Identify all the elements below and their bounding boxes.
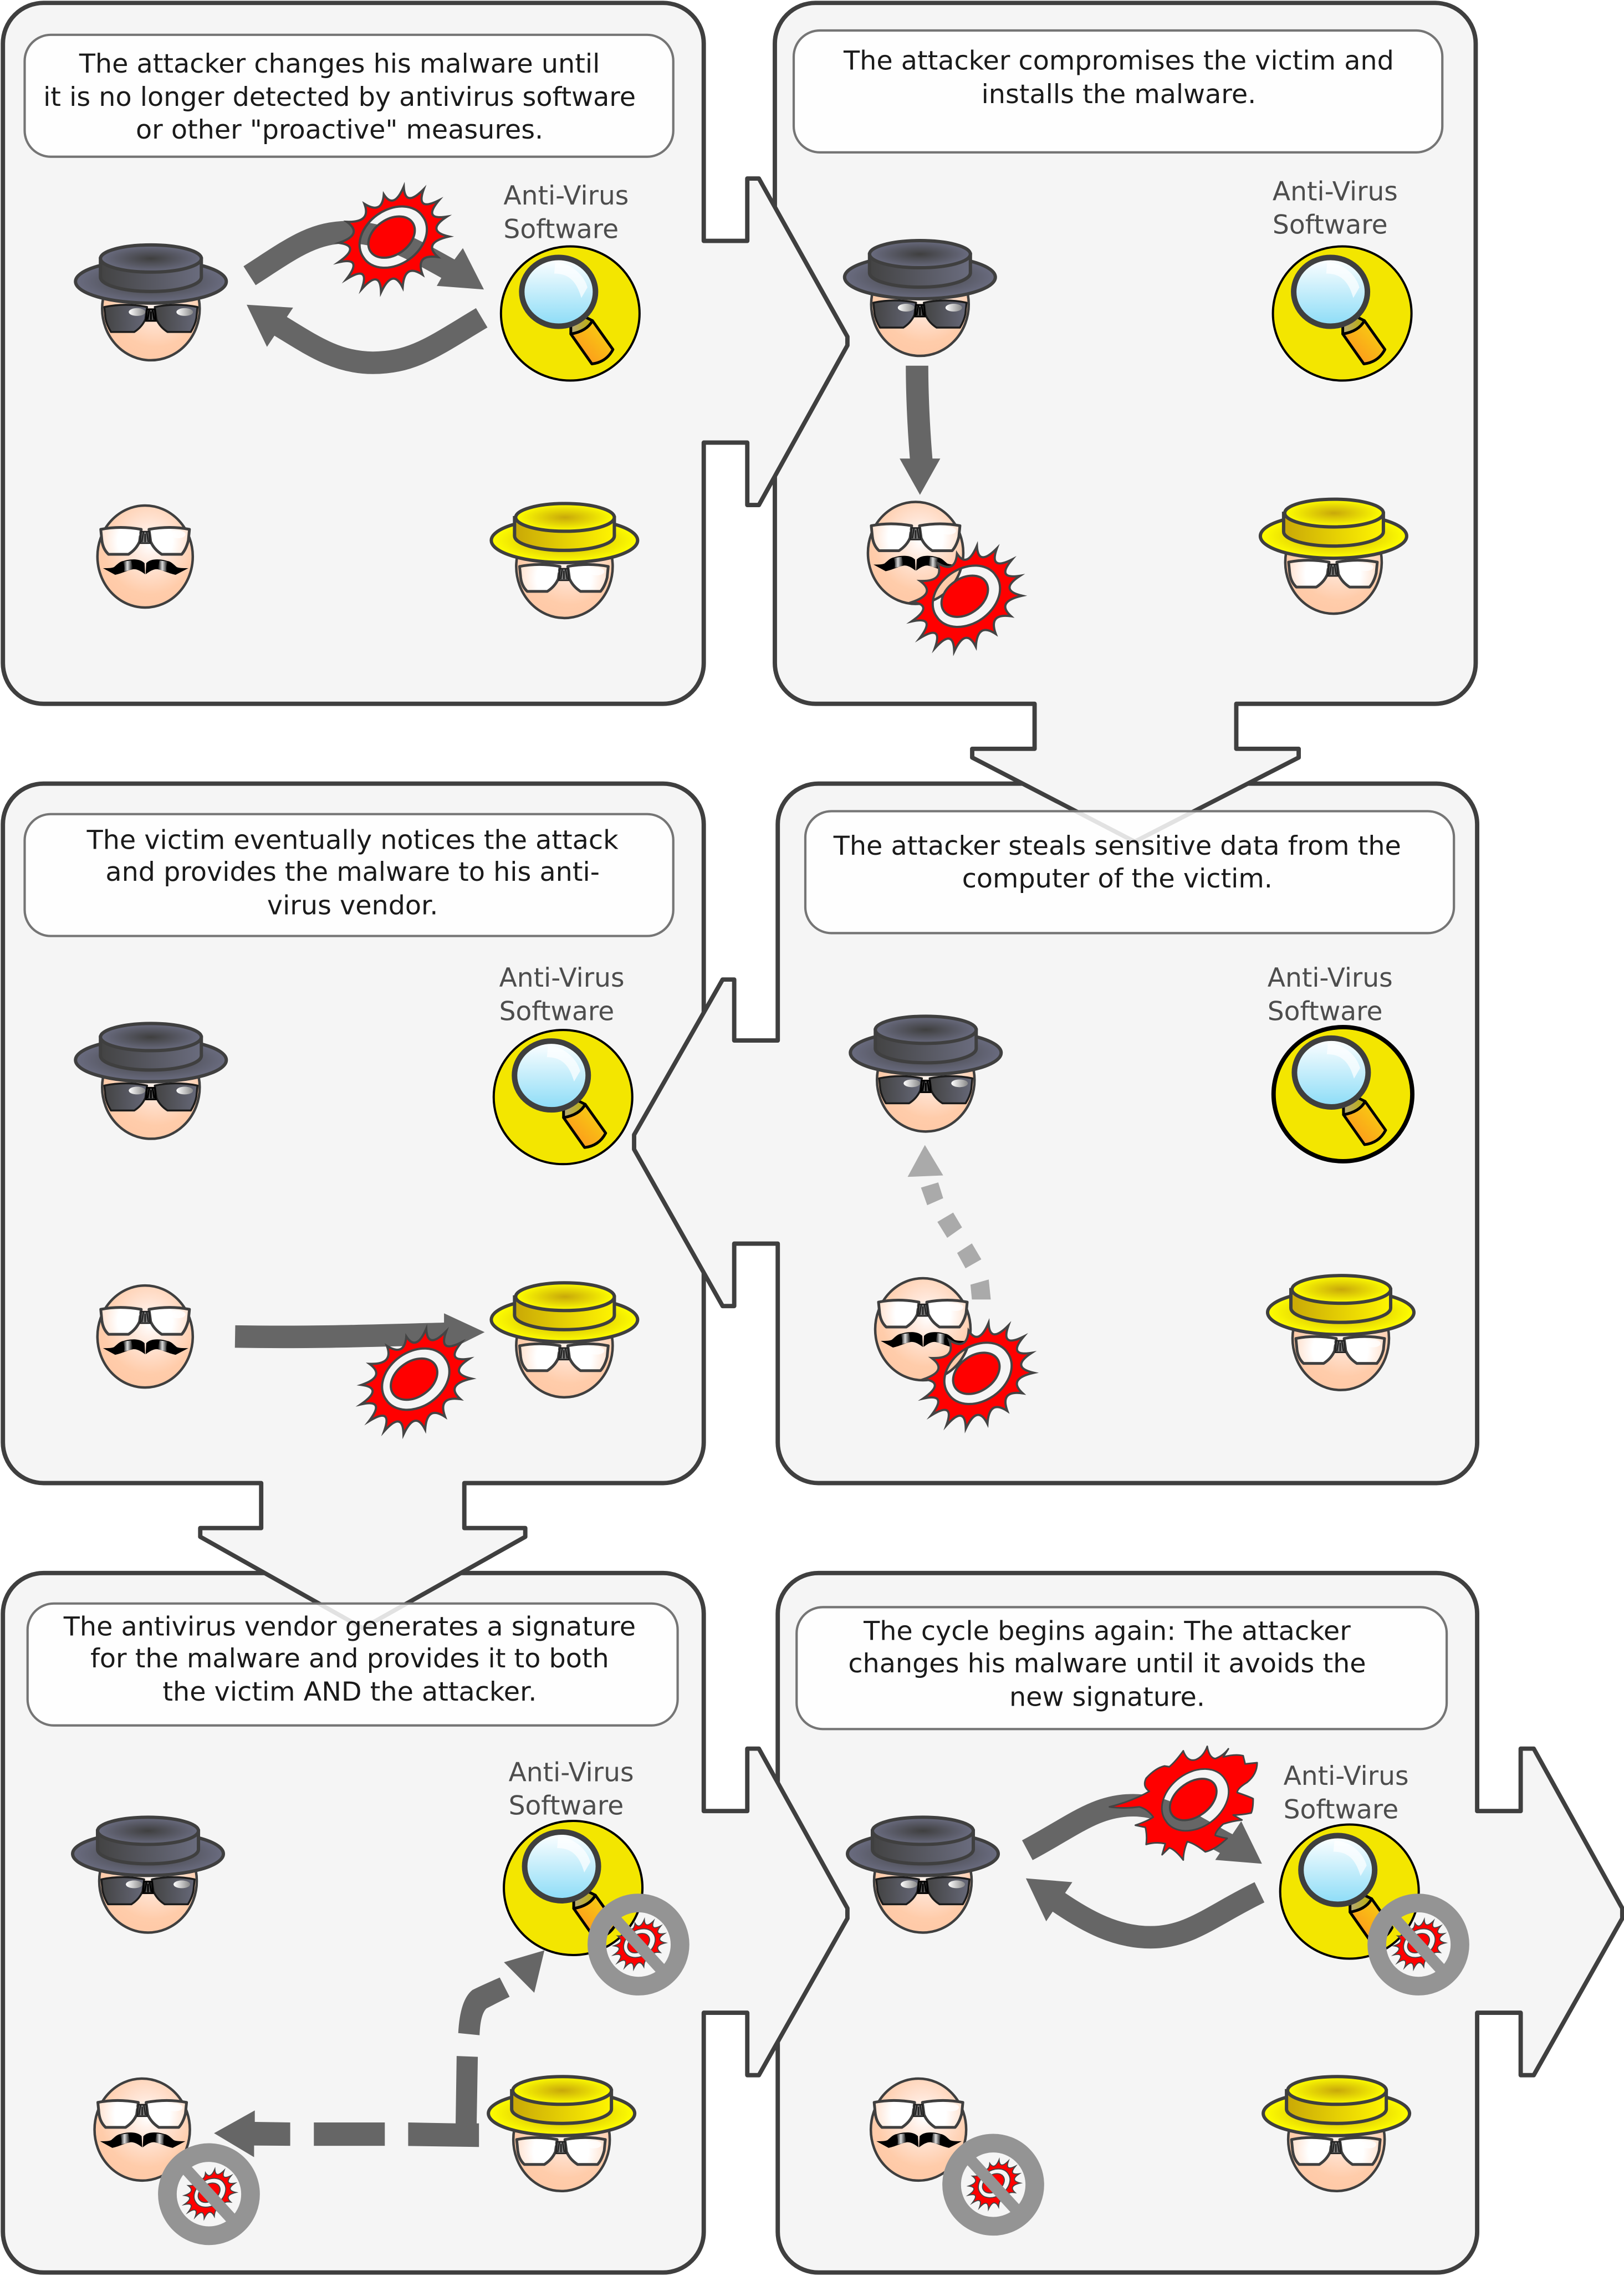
panel outline: step 6 with exit arrow [778,1573,1622,2273]
text box: step 6: The cycle begins again: The attacker [863,1616,1351,1646]
panel outline: step 2 with arrow to step 4 [775,3,1475,841]
icon: antivirus vendor [1268,1275,1414,1390]
panel: step 5 contents [28,1604,680,2236]
icon: victim [98,1285,193,1387]
label: anti-virus software: Software [1284,1794,1398,1825]
icon: blocked malware at anti-virus [1377,1903,1460,1986]
icon: blocked malware at victim [952,2143,1035,2226]
panel: step 3 contents [25,814,673,1435]
label: anti-virus software: Software [1268,996,1382,1027]
arrow: dashed signature distribution [214,1951,544,2157]
arrow: attacker tests malware against antivirus [249,232,484,289]
icon: attacker [845,241,995,356]
text box: step 6: new signature. [1009,1682,1205,1712]
label: anti-virus software: Software [503,214,619,244]
text box: step 6 [796,1607,1447,1729]
label: anti-virus software: Anti-Virus [1268,963,1393,993]
text box: step 2: installs the malware. [982,79,1256,110]
text box: step 6: changes his malware until it avoids the [848,1649,1366,1679]
icon: antivirus vendor [488,2076,635,2191]
icon: anti-virus magnifier [1274,1027,1412,1161]
icon: attacker [75,1023,226,1139]
panel: step 4 contents [805,811,1454,1428]
icon: victim [98,506,193,608]
icon: attacker [73,1817,223,1932]
icon: antivirus vendor [491,503,637,618]
icon: attacker [75,245,226,360]
text box: step 1 [25,35,673,157]
icon: victim [868,502,963,604]
label: anti-virus software: Anti-Virus [503,181,629,211]
arrow: antivirus feedback to attacker [247,305,482,363]
text box: step 3: virus vendor. [267,890,438,921]
text box: step 5 [28,1604,678,1726]
text box: step 5: The antivirus vendor generates a signature [63,1611,636,1642]
label: anti-virus software: Anti-Virus [499,963,625,993]
text box: step 4: The attacker steals sensitive data from the [833,831,1401,861]
text box: step 3: and provides the malware to his anti- [105,857,600,887]
label: anti-virus software: Anti-Virus [1273,176,1398,207]
arrow: attacker to victim [900,366,940,495]
text box: step 4: computer of the victim. [962,864,1273,894]
panel outline: step 5 with arrow to step 6 [3,1573,847,2273]
label: anti-virus software: Anti-Virus [509,1758,634,1788]
icon: blocked malware at victim [167,2152,251,2236]
panel outline: step 4 with arrow to step 3 [634,784,1477,1483]
arrow: attacker tests mutated malware [1028,1805,1262,1864]
panel outline: step 1 with arrow to step 2 [3,3,847,704]
icon: victim [95,2079,190,2181]
panel: step 6 contents [796,1607,1460,2226]
label: anti-virus software: Software [499,996,614,1027]
icon: anti-virus magnifier [1280,1824,1419,1959]
text box: step 5: the victim AND the attacker. [162,1677,537,1707]
icon: attacker [847,1817,998,1932]
text box: step 1: or other "proactive" measures. [136,115,543,145]
text box: step 1: The attacker changes his malware until [79,49,600,79]
icon: anti-virus magnifier [1273,246,1412,380]
icon: anti-virus magnifier [501,246,640,380]
text box: step 4 [805,811,1454,933]
arrow: victim to vendor [235,1313,484,1353]
label: anti-virus software: Software [509,1791,624,1821]
icon: malware on victim [923,1323,1034,1428]
icon: anti-virus magnifier [504,1821,642,1955]
text box: step 5: for the malware and provides it to both [90,1644,609,1674]
arrow: dashed data flow to attacker [908,1145,991,1299]
icon: attacker [850,1016,1001,1131]
icon: victim [875,1278,971,1380]
panel: step 2 contents [794,30,1442,651]
panel: step 1 contents [25,35,673,618]
arrow: antivirus feedback to attacker [1026,1879,1259,1937]
icon: victim [871,2079,966,2181]
text box: step 1: it is no longer detected by antivirus software [43,82,636,113]
icon: malware [361,1329,472,1435]
label: anti-virus software: Software [1273,210,1388,240]
icon: anti-virus magnifier [494,1030,632,1164]
icon: blocked malware at anti-virus [597,1903,680,1986]
icon: antivirus vendor [1263,2076,1409,2191]
text box: step 3: The victim eventually notices the attack [86,825,619,856]
panel outline: step 3 with arrow to step 5 [3,784,704,1628]
text box: step 2 [794,30,1442,152]
icon: antivirus vendor [491,1283,637,1397]
text box: step 2: The attacker compromises the victim and [843,46,1394,76]
icon: malware [338,187,449,292]
icon: mutated malware [1110,1746,1257,1860]
text box: step 3 [25,814,673,936]
icon: malware on victim [912,546,1022,651]
label: anti-virus software: Anti-Virus [1284,1761,1409,1792]
icon: antivirus vendor [1260,499,1407,614]
